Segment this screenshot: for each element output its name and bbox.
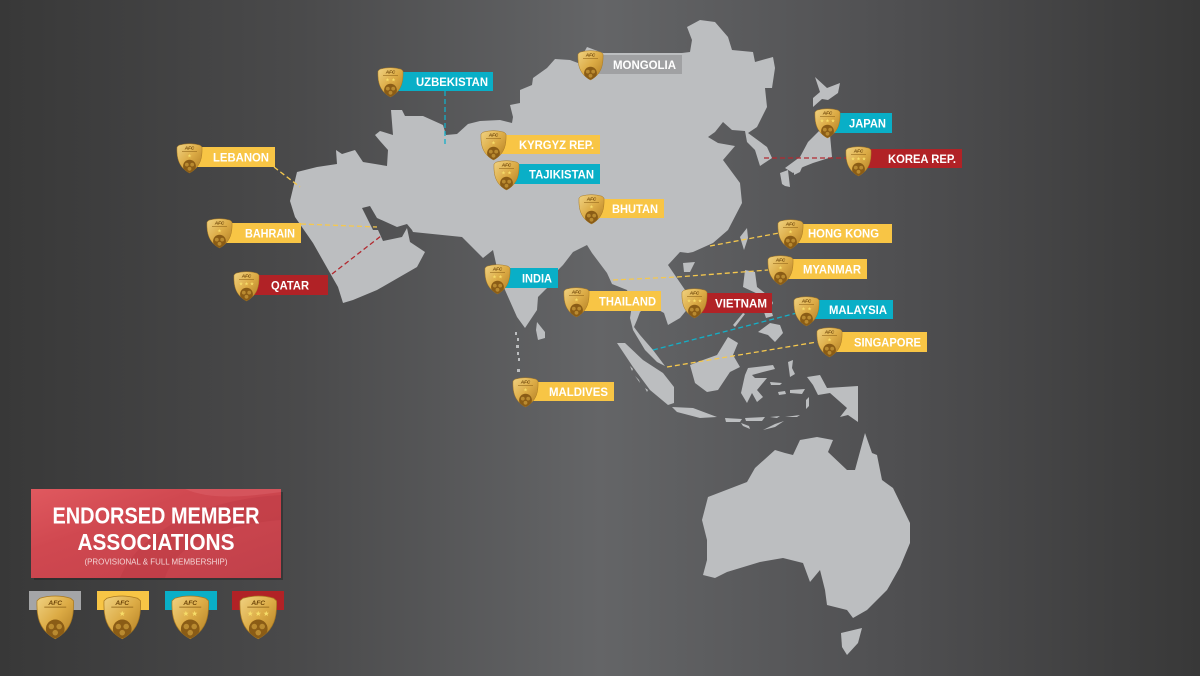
label: India: INDIA bbox=[522, 272, 552, 286]
map: Philippines bbox=[733, 270, 783, 342]
label: Korea Republic: AFC bbox=[853, 148, 864, 154]
connector: Malaysia bbox=[653, 313, 797, 350]
label: Thailand: THAILAND bbox=[599, 294, 656, 308]
label: Bhutan: BHUTAN bbox=[612, 202, 658, 216]
map: Maldives bbox=[515, 332, 520, 372]
connector: Hong Kong bbox=[710, 233, 779, 246]
legend: red tier, three stars bbox=[232, 591, 284, 639]
label: Bhutan bbox=[579, 195, 664, 224]
legend: teal tier, two stars: AFC bbox=[182, 600, 197, 607]
label: Vietnam: VIETNAM bbox=[715, 296, 767, 310]
label: India bbox=[485, 265, 558, 294]
map: Australia bbox=[702, 433, 910, 618]
label: Japan bbox=[815, 109, 892, 138]
label: Vietnam bbox=[682, 289, 772, 318]
label: Tajikistan: AFC bbox=[501, 162, 512, 168]
label: Bahrain: AFC bbox=[214, 220, 225, 226]
label: Qatar: QATAR bbox=[271, 278, 309, 292]
label: Maldives bbox=[513, 378, 614, 407]
map: Borneo bbox=[690, 337, 740, 392]
connector: Qatar bbox=[332, 236, 381, 274]
label: Malaysia: MALAYSIA bbox=[829, 303, 887, 317]
title text line two: ASSOCIATIONS bbox=[78, 529, 234, 555]
label: Thailand bbox=[564, 288, 661, 317]
subtitle: (PROVISIONAL & FULL MEMBERSHIP) bbox=[84, 556, 228, 566]
label: Hong Kong: HONG KONG bbox=[808, 226, 879, 240]
map: Sulawesi bbox=[741, 365, 775, 403]
legend: red tier, three stars: AFC bbox=[250, 600, 265, 607]
label: Qatar bbox=[234, 272, 328, 301]
map: Sri Lanka bbox=[536, 322, 545, 340]
legend: yellow tier, one star bbox=[97, 591, 149, 639]
connector: Korea Republic bbox=[764, 157, 846, 159]
label: Vietnam: AFC bbox=[689, 290, 700, 296]
label: Mongolia: MONGOLIA bbox=[613, 58, 676, 72]
label: Tajikistan bbox=[494, 161, 600, 190]
label: Qatar: AFC bbox=[241, 274, 252, 278]
label: Korea Republic bbox=[846, 147, 962, 176]
label: Myanmar bbox=[768, 256, 867, 285]
label: Lebanon: LEBANON bbox=[213, 150, 269, 164]
label: Thailand: AFC bbox=[571, 290, 582, 294]
label: Myanmar: AFC bbox=[775, 258, 786, 262]
title text: ENDORSED MEMBER bbox=[52, 502, 260, 528]
label: Malaysia bbox=[794, 297, 893, 326]
map: Taiwan bbox=[740, 228, 748, 250]
map: New Guinea bbox=[807, 375, 858, 422]
label: Maldives: MALDIVES bbox=[549, 385, 608, 399]
label: Singapore: SINGAPORE bbox=[854, 336, 921, 350]
map: mainland Asia bbox=[290, 20, 775, 366]
map: Moluccas bbox=[770, 360, 809, 409]
label: Hong Kong bbox=[778, 220, 892, 249]
label: India: AFC bbox=[492, 266, 503, 272]
label: Uzbekistan: AFC bbox=[385, 70, 396, 74]
title panel bbox=[31, 489, 283, 580]
legend: yellow tier, one star: AFC bbox=[114, 600, 129, 607]
label: Myanmar: MYANMAR bbox=[803, 262, 861, 276]
label: Bahrain bbox=[207, 219, 301, 248]
label: Kyrgyz Republic: AFC bbox=[488, 132, 499, 138]
label: Bhutan: AFC bbox=[586, 196, 597, 202]
label: Singapore: AFC bbox=[824, 330, 835, 334]
label: Japan: AFC bbox=[822, 110, 833, 116]
legend: grey tier: AFC bbox=[47, 600, 62, 607]
label: Hong Kong: AFC bbox=[785, 222, 796, 226]
label: Kyrgyz Republic: KYRGYZ REP. bbox=[519, 138, 594, 152]
map: Hainan bbox=[683, 262, 695, 272]
label: Mongolia: AFC bbox=[585, 52, 596, 58]
label: Kyrgyz Republic bbox=[481, 131, 600, 160]
connector: Uzbekistan bbox=[444, 91, 446, 144]
label: Tajikistan: TAJIKISTAN bbox=[529, 168, 594, 182]
label: Singapore bbox=[817, 328, 927, 357]
legend: grey tier bbox=[29, 591, 81, 639]
map: Java and Lesser Sunda Islands bbox=[672, 407, 800, 430]
label: Japan: JAPAN bbox=[849, 116, 886, 130]
label: Maldives: AFC bbox=[520, 380, 531, 384]
connector: Bahrain bbox=[301, 224, 377, 227]
label: Lebanon: AFC bbox=[184, 146, 195, 150]
label: Uzbekistan: UZBEKISTAN bbox=[416, 75, 488, 89]
map: Sumatra bbox=[617, 343, 674, 405]
label: Korea Republic: KOREA REP. bbox=[888, 152, 956, 166]
label: Uzbekistan bbox=[378, 68, 493, 97]
map of Asia and Australia bbox=[290, 20, 910, 655]
label: Lebanon bbox=[177, 144, 275, 173]
connector: Myanmar bbox=[613, 270, 768, 280]
label: Mongolia bbox=[578, 51, 682, 80]
label: Malaysia: AFC bbox=[801, 298, 812, 304]
connector: Singapore bbox=[667, 342, 817, 367]
label: Bahrain: BAHRAIN bbox=[245, 226, 295, 240]
map: Tasmania bbox=[841, 628, 862, 655]
legend: teal tier, two stars bbox=[165, 591, 217, 639]
connector: Lebanon bbox=[274, 167, 300, 187]
map: Japan bbox=[780, 77, 840, 187]
